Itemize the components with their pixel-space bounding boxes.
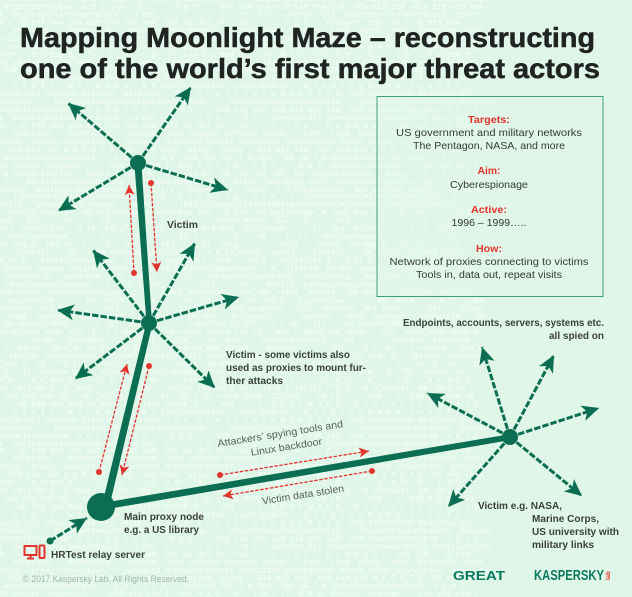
aim: Aim:: [478, 165, 500, 177]
active: [452, 204, 526, 229]
targets: The Pentagon, NASA, and more: [413, 140, 565, 152]
label: main proxy node: [124, 512, 204, 536]
label: endpoints: [403, 318, 604, 342]
panel: summary box: [377, 96, 603, 296]
label: victim data stolen: Victim data stolen: [261, 484, 345, 507]
node: right victim: [427, 347, 599, 507]
aim: [450, 165, 528, 191]
label: victim proxies: used as proxies to mount fur-: [226, 363, 366, 374]
copyright: © 2017 Kaspersky Lab. All Rights Reserved.: [23, 574, 189, 584]
how: [390, 243, 588, 281]
how: How:: [476, 243, 502, 255]
label: victim: Victim: [167, 220, 198, 231]
node: main proxy: [87, 493, 115, 521]
icon: monitor and phone: [24, 546, 44, 558]
label: attackers' tools: Linux backdoor: [250, 437, 324, 459]
red arrows: lower link: [96, 363, 152, 475]
label: HRTest relay server: HRTest relay server: [51, 550, 145, 561]
label: attackers' tools: [217, 419, 346, 464]
active: Active:: [471, 204, 507, 216]
label: right victim: military links: [532, 540, 594, 551]
label: victim proxies: Victim - some victims also: [226, 350, 350, 361]
background: code text pattern: Encoders GdipSaveImageToStreamDisposeImage GdipGetImageEncoders GdipSaveImage GdipGetImageEnc NegDeleteKeyExW a d v a p i 3 2 X g Q #6A si@ #6A si@ si@ #6A si@ #6A si@ si@ #6A si@ si@ #6A k DestroyEnvironmentBlock :d del s " X s " X s userenv.dll CreateEnvironmentBlock Destr A = ~@ FTA @UA cUA &&C 7+@ JWA cWA off %s del /F "%s" / c " X s " ComSpec zS@ .UA = ~@ FTA @UA PROPFIND PROPPATCH SEARCH PUT CONNECT OPTIONS TRACE COPY LOCK MKCOL MOVE PROPFIND PROP ction proxy-connection content M-SEARCH NOTIFY SUBSCRIBE UNSUBSCRIBE PATCH PURGE connection proxy-conn esA esA usA d A P A T A VA xed keep alive close BIA wIA sIA esA esA usA d A P A T A VA xed keep Y"@~ ^ 8_e'$e@ 5_ "=J~ 5_Y"8_ -@~ "~ -=J= 8_e'$e@ 5_ ~ =J- @ +-" -=J- 8_Y" "8_ ! Y"@~ ^ 8_e'$e@ 5_ #0 j@=]+@A-I_-@ "WW@ - _,@0 =@@ _,J1M\%C [n1M#@,@ I#l.-+$+@ T=+1Z7I# ^"@ n_,.@ H[Mu1m#I #0 j@=]+@A-I_ I$@ Si@ #6A V@ ' o0 "oY"YA sI@ _ ,@I- dy,z yN +-vI@ $%V@ oIIjuY@ C0 C0 : #AS . I I$@ Si@ #6A V@ _W@ E@@ vmc Bc@ A@ RIA@ I#II111@ M&PvE V HyB ~ :\ S O F T W A R E \ M i c r o s o f t \ W i n d r o s o f t \ W i n d o w s N T |etProcAddress LoadLibraryA d i s p l a y N a m e r o s o f t iplus.dll Gdiplus Startup GdiplusS \ X s P r o f i l e I m a g e P a t h #6@ I#&0x#@&Rx #Gdiplus.dll ncoders GdipSaveImageToStreamDisposeImage GdipGetImageEncodersSize GdipGetImageEncoders GdipSav NegDeleteKeyExW a d v a p i 3 2 X g Q #6A si@ #6A si@ si@ #6A si@ A9A RegDeleteKeyExW a d v a k DestroyEnvironmentBlock :d del s " X s " X s userenv.dll CreateEnvironmentBlock DestroyEnviro A = ~@ FTA @UA cUA &&C 7+@ JWA cWA off %s del /F "%s" / c " X s " C o m S p e c zS@ .UA = ~@ FTA PROPFIND PROPPATCH SEARCH PUT CONNECT OPTIONS TRACE COPY LOCK MKCOL MOVE PROPFIND PROP ction proxy-connection contentE M-SEARCH NOTIFY SUBSCRIBE UNSUBSCRIBE PATCH PURGE connection proxy-con esA esA usA d A P A T A VA xed keep alive close BIA wIA sIA esA esA usA d A P A T A VA xed keep SHGetKnownFolderPath s h e l l 3 2 xeA f6C f6C I @ I@A "@A uA I @ SHGetKnownFolderPath s h e l l SA Accept-Language: #6A si@ #6A I 8cA # X Y ! S : ( M I ; : N R N Accept-Language: #6A si@ #6A I B Authorization Basic 0 : 0 td div h1 h2 h3 h4 h5 h6 Authorization Basic 0 : 0 td I ObtainUserAgentString "IM'www.google.com/ http://www.bing.com/ ObtainUserAgentString "IM'www.g acious bcdfghjklmnpqrstvwxyzD I S/1.1 Connection: Close ? @ ProductInfo 9@B aeiouAE bcdfghjklmnpqrst ilB6wY#@CDEFGHIJKLMNOPQRSTUVWxe d C r y p t o g r a p h i c ilB6wY#@CDEFGHIJKLMNOPQRSTUVWxe d C r VZ[\]^_`abcdefghijklmnopq S Y<_}+/ j$$$jrstuvwxyz[$$$$$$$$?@ABCDEFGHIJKLMNOPQRSTUVW$$$$$$$$KVZ[\]^_ , n0WZ"e'YcyR+$- n0'Q6QjKn1@D+,R n0WZ"NyB CyB "_B o1B n0'Q6QjKn1@D+,R n0WZ"NyB CyB ?+@ n0WZ"e'YcyR+$- &wZ $|t =iX | +U | +@ f m p hW"VU HKbRV &wZ $|t =iX | +U | +@ f m p CWJ #3I=<(6/w~- 3 t&--E$"z"- ^_".tk "/II1 R:8Y$=9 Z|tC$bWdH =-() CWJ #3I=<(6/w~- 3 t&--E$"z UDRC"aU0mB0@# '`z-"''"soV"|"? $$ I * . @ RB I! tt UDRC"aU0mB0@# '`z-"''"soV"|"? #=-#@$_@ -I$&-#I--| # 1pzoe- t$J pl +Ukg " x#II WJRVZ #=-#@$_@ -I$&-#I--| # "ISNfdI1 ZE #$$@ HCE#m5@ @k%?Z|$Yf@'|"e_U_FZ_V#URS #a#BJ "ISNfdI1 ZE #$$@ HCE#m5@ @k%?Z 8_#t-@ _$&#=$I@I@#W+~+RZ' TI| | $6@A #X+x #"@+-! uM_I_ "#?!$$|"YI $ 8_#t-@ _$&#=$I@I@#W+~+RZ' QF"GBU ydmmm@ oP]qfI 7+@dU+ $ #0 #I$"@%edxrnJI$@mmdkue+ ! X q|s$$I# QF"GBU ydmmm@ oP]qfI 7+@dU+ $ #0 "Vy#"=@#t@, #@mdUDGH dUJ #0K@^ -~- "I! #$Ef@gPK$j\WbYNJzXv "Vy#"=@#t@, #@mdUDGH dUJ #0K@^ -~- ndnmaiuOoaouInoonoe = _ -Z > fo_ +'" ;"=ttt / Y+- _ #?+I.% ndnmaiuOoaouInoonoe = _ -Z > fo_ +' !UF-V#GIX\"=@#XS5bR\GR6sym[I_I:I JOBCE_zVMIKII" =#Y,Y@?,=+$&I #Y#$$$ !UF-V#GIX\"=@#XS5bR\GR6sym[I eginorm|wk: BE MILM JK " =$# ]I# ym|=# cKI.3PG D eginorm|wk: BE MILM JK " =$# RBSXP#M 0EI MAAC :X9I E)i@D 3[+*/.5< oFEL@I@@N@#T "ZJU RBSXP#M 0EI MAAC :X9I E)i@D -IM@$ ?Q@CQAU 9OR4U^LIN [@Y-TP*NQ: @N;GQ0 1F|cbpq[6-\ J#WCD0= -IM@$ ?Q@CQAU 9OR4U^LIN [@Y OA-SQ%UWY/NMRU I \B' uiicq# ;.YH$%I7AQ Di @?R :I Y =0- "[| OA-SQ%UWY/NMRU I \B' uiic emy@"si#e eo@s #!%_,$ v (<$oeeee!I"=# oi@@s ZSeau YY# Y% ! AU$ ~ @@^@|Y@E_#Ee@e hiY emy@"s: [0, 0, 502, 597]
logo: Kaspersky Lab: KASPERSKY: [534, 568, 604, 584]
active: 1996 – 1999…..: [452, 217, 526, 229]
logo: Kaspersky Lab: lab: [606, 571, 612, 580]
label: main proxy node: Main proxy node: [124, 512, 204, 523]
red arrows: horizontal link: [217, 451, 375, 496]
label: right victim: [478, 501, 619, 551]
label: victim proxies: [226, 350, 366, 387]
node: middle victim proxy: [57, 243, 239, 388]
targets: US government and military networks: [396, 127, 582, 139]
how: Tools in, data out, repeat visits: [416, 269, 562, 281]
how: Network of proxies connecting to victims: [390, 256, 588, 268]
label: main proxy node: e.g. a US library: [124, 525, 199, 536]
title: [20, 22, 600, 84]
arrow: relay server to main proxy: [46, 518, 87, 544]
label: right victim: US university with: [532, 527, 619, 538]
label: attackers' tools: Attackers’ spying tools and: [217, 419, 344, 450]
label: endpoints: Endpoints, accounts, servers, systems etc.: [403, 318, 604, 329]
label: right victim: Marine Corps,: [532, 514, 599, 525]
targets: Targets:: [468, 114, 510, 126]
red arrows: upper link: [129, 180, 157, 276]
label: right victim: Victim e.g. NASA,: [478, 501, 562, 512]
logo: GReAT: GREAT: [453, 568, 505, 583]
title: one of the world’s first major threat actors: [20, 53, 600, 84]
network trunk lines: [102, 165, 505, 510]
aim: Cyberespionage: [450, 179, 528, 191]
node: upper victim: [58, 87, 228, 211]
label: victim proxies: ther attacks: [226, 376, 283, 387]
label: endpoints: all spied on: [549, 331, 604, 342]
title: Mapping Moonlight Maze – reconstructing: [20, 22, 595, 53]
targets: [396, 114, 582, 152]
